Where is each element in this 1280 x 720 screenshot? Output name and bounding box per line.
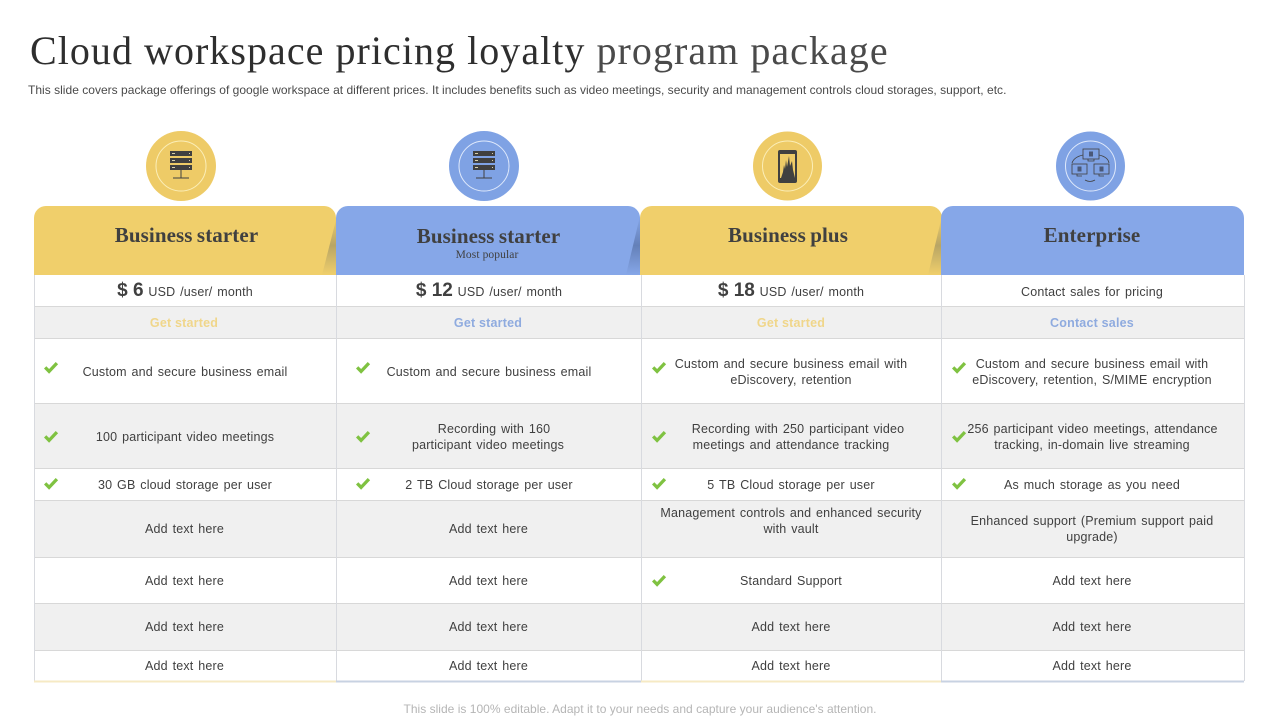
feature: security: with vault bbox=[762, 522, 819, 536]
feature: security: Management controls and enhanced security bbox=[660, 506, 922, 520]
call to action row: Get started bbox=[454, 316, 522, 330]
placeholder row two bbox=[145, 659, 1131, 673]
feature: cloud storage: 2 TB Cloud storage per user bbox=[405, 478, 573, 492]
title: Cloud workspace pricing loyalty program package bbox=[30, 28, 889, 73]
call to action row: Get started bbox=[150, 316, 218, 330]
feature: business email: eDiscovery, retention, S/MIME encryption bbox=[972, 373, 1212, 387]
feature: business email: Custom and secure business email bbox=[83, 365, 287, 379]
placeholder row one bbox=[145, 620, 1131, 634]
feature: security bbox=[145, 506, 1213, 544]
feature: video meetings: 100 participant video meetings bbox=[96, 430, 274, 444]
feature: video meetings: meetings and attendance tracking bbox=[693, 438, 889, 452]
call to action row: Get started bbox=[757, 316, 825, 330]
header: Enterprise bbox=[941, 206, 1244, 275]
feature: business email: Custom and secure business email with bbox=[675, 357, 907, 371]
header: Enterprise: Enterprise bbox=[1044, 223, 1140, 247]
call to action row bbox=[150, 316, 1134, 330]
pricing row bbox=[117, 280, 1163, 301]
feature: security: Add text here bbox=[145, 522, 224, 536]
feature: cloud storage: As much storage as you need bbox=[1004, 478, 1180, 492]
header: Business plus: Business plus bbox=[728, 223, 848, 247]
feature: support bbox=[145, 574, 1131, 588]
pricing row: $ 18 USD /user/ month bbox=[718, 280, 864, 301]
header: Business starter blue: Business starter bbox=[417, 224, 560, 248]
feature: support: Standard Support bbox=[740, 574, 842, 588]
pricing row: Contact sales for pricing bbox=[1021, 285, 1163, 299]
feature: security: Enhanced support (Premium support paid bbox=[971, 514, 1213, 528]
feature: business email bbox=[44, 357, 1212, 387]
table rows background bbox=[34, 275, 1244, 682]
header: Business plus bbox=[640, 206, 942, 275]
header: Business starter yellow: Business starter bbox=[115, 223, 258, 247]
call to action row: Contact sales bbox=[1050, 316, 1134, 330]
feature: security: Add text here bbox=[449, 522, 528, 536]
header: Business starter blue: Most popular bbox=[456, 249, 518, 261]
feature: business email: Custom and secure business email with bbox=[976, 357, 1208, 371]
placeholder row two: Add text here bbox=[752, 659, 830, 673]
icon: smartphone chart bbox=[753, 132, 822, 200]
placeholder row one: Add text here bbox=[1053, 620, 1131, 634]
feature: video meetings: participant video meetings bbox=[412, 438, 564, 452]
footer note: This slide is 100% editable. Adapt it to your needs and capture your audience's attention. bbox=[403, 702, 877, 716]
icon: server yellow bbox=[146, 131, 216, 201]
placeholder row one: Add text here bbox=[752, 620, 830, 634]
feature: video meetings bbox=[44, 422, 1218, 452]
feature: support: Add text here bbox=[145, 574, 224, 588]
feature: cloud storage bbox=[44, 478, 1180, 492]
feature: video meetings: Recording with 160 bbox=[438, 422, 550, 436]
feature: video meetings: Recording with 250 participant video bbox=[692, 422, 904, 436]
placeholder row one: Add text here bbox=[449, 620, 528, 634]
feature: cloud storage: 5 TB Cloud storage per user bbox=[707, 478, 875, 492]
header: Business starter blue bbox=[336, 206, 640, 275]
subtitle: This slide covers package offerings of google workspace at different prices. It includes benefits such as video meetings, security and management controls cloud storages, support, etc. bbox=[28, 83, 1006, 97]
icon: server blue bbox=[449, 131, 519, 201]
placeholder row two: Add text here bbox=[145, 659, 224, 673]
feature: support: Add text here bbox=[449, 574, 528, 588]
placeholder row two: Add text here bbox=[1053, 659, 1131, 673]
feature: business email: eDiscovery, retention bbox=[730, 373, 852, 387]
placeholder row two: Add text here bbox=[449, 659, 528, 673]
pricing row: $ 12 USD /user/ month bbox=[416, 280, 562, 301]
feature: video meetings: 256 participant video meetings, attendance bbox=[967, 422, 1218, 436]
feature: security: upgrade) bbox=[1066, 530, 1118, 544]
icon: network computers bbox=[1056, 132, 1125, 200]
header: Business starter yellow bbox=[34, 206, 337, 275]
pricing row: $ 6 USD /user/ month bbox=[117, 280, 253, 301]
feature: support: Add text here bbox=[1053, 574, 1131, 588]
placeholder row one: Add text here bbox=[145, 620, 224, 634]
feature: video meetings: tracking, in-domain live streaming bbox=[994, 438, 1190, 452]
feature: business email: Custom and secure business email bbox=[387, 365, 591, 379]
feature: cloud storage: 30 GB cloud storage per user bbox=[98, 478, 272, 492]
